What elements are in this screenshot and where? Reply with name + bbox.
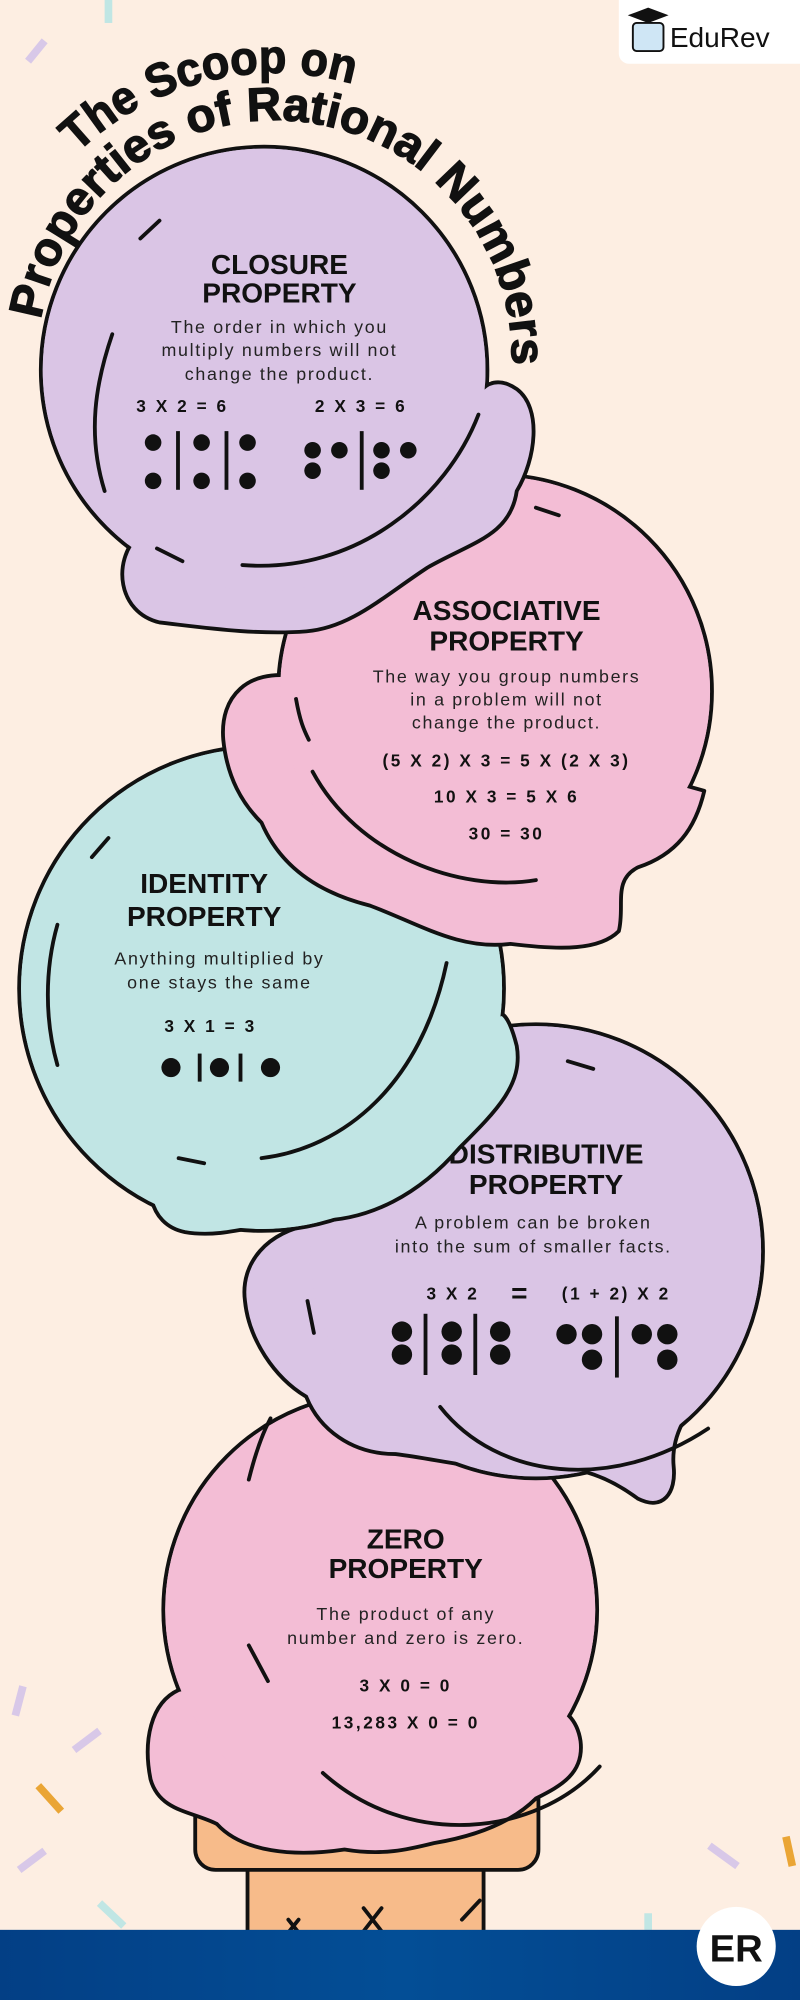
logo: ER badge bbox=[697, 1907, 776, 1986]
scoop: zero property bbox=[148, 1393, 600, 1853]
associative equations: (5 X 2) X 3 = 5 X (2 X 3) bbox=[383, 751, 631, 771]
closure dots bbox=[145, 431, 417, 490]
logo: EduRev bbox=[619, 0, 800, 64]
zero equations: 3 X 0 = 0 bbox=[360, 1675, 452, 1695]
footer bar bbox=[0, 1930, 800, 2000]
logo: EduRev: EduRev bbox=[670, 22, 770, 53]
closure body: multiply numbers will not bbox=[161, 340, 397, 360]
ice cream cone bbox=[195, 1777, 538, 1939]
zero body: The product of any bbox=[316, 1604, 495, 1624]
identity equation: 3 X 1 = 3 bbox=[164, 1016, 257, 1036]
distributive equation: (1 + 2) X 2 bbox=[562, 1284, 671, 1304]
scoop: associative property bbox=[223, 474, 712, 948]
zero heading: PROPERTY bbox=[329, 1553, 483, 1584]
distributive dot arrays bbox=[392, 1314, 678, 1378]
distributive heading: PROPERTY bbox=[469, 1169, 624, 1200]
identity heading: IDENTITY bbox=[140, 868, 268, 899]
associative body: in a problem will not bbox=[410, 689, 603, 709]
distributive equation: 3 X 2 bbox=[426, 1284, 479, 1304]
zero equations: 13,283 X 0 = 0 bbox=[332, 1712, 480, 1732]
associative body: change the product. bbox=[412, 712, 601, 732]
distributive equation: = bbox=[511, 1277, 530, 1308]
closure heading: CLOSURE bbox=[211, 249, 348, 280]
identity heading: PROPERTY bbox=[127, 901, 282, 932]
associative heading: ASSOCIATIVE bbox=[413, 595, 601, 626]
distributive heading: DISTRIBUTIVE bbox=[449, 1138, 643, 1169]
distributive body: A problem can be broken bbox=[415, 1212, 652, 1232]
zero body: number and zero is zero. bbox=[287, 1628, 524, 1648]
associative body: The way you group numbers bbox=[373, 666, 640, 686]
associative heading: PROPERTY bbox=[429, 626, 584, 657]
title: The Scoop on bbox=[55, 46, 355, 147]
associative equations: 30 = 30 bbox=[469, 823, 544, 843]
scoop: closure property bbox=[41, 147, 534, 632]
distributive body: into the sum of smaller facts. bbox=[395, 1237, 672, 1257]
closure equations: 2 X 3 = 6 bbox=[315, 396, 407, 416]
identity dots bbox=[161, 1054, 280, 1082]
identity body: one stays the same bbox=[127, 973, 312, 993]
associative equations: 10 X 3 = 5 X 6 bbox=[434, 786, 579, 806]
title: Properties of Rational Numbers bbox=[8, 87, 538, 364]
closure equations: 3 X 2 = 6 bbox=[136, 396, 229, 416]
scoop: identity property bbox=[19, 746, 518, 1234]
closure body: The order in which you bbox=[171, 317, 388, 337]
identity body: Anything multiplied by bbox=[114, 948, 325, 968]
logo: ER badge: ER bbox=[710, 1928, 763, 1971]
closure heading: PROPERTY bbox=[202, 277, 357, 308]
closure body: change the product. bbox=[185, 364, 374, 384]
scoop: distributive property bbox=[244, 1024, 763, 1503]
zero heading: ZERO bbox=[367, 1523, 445, 1554]
